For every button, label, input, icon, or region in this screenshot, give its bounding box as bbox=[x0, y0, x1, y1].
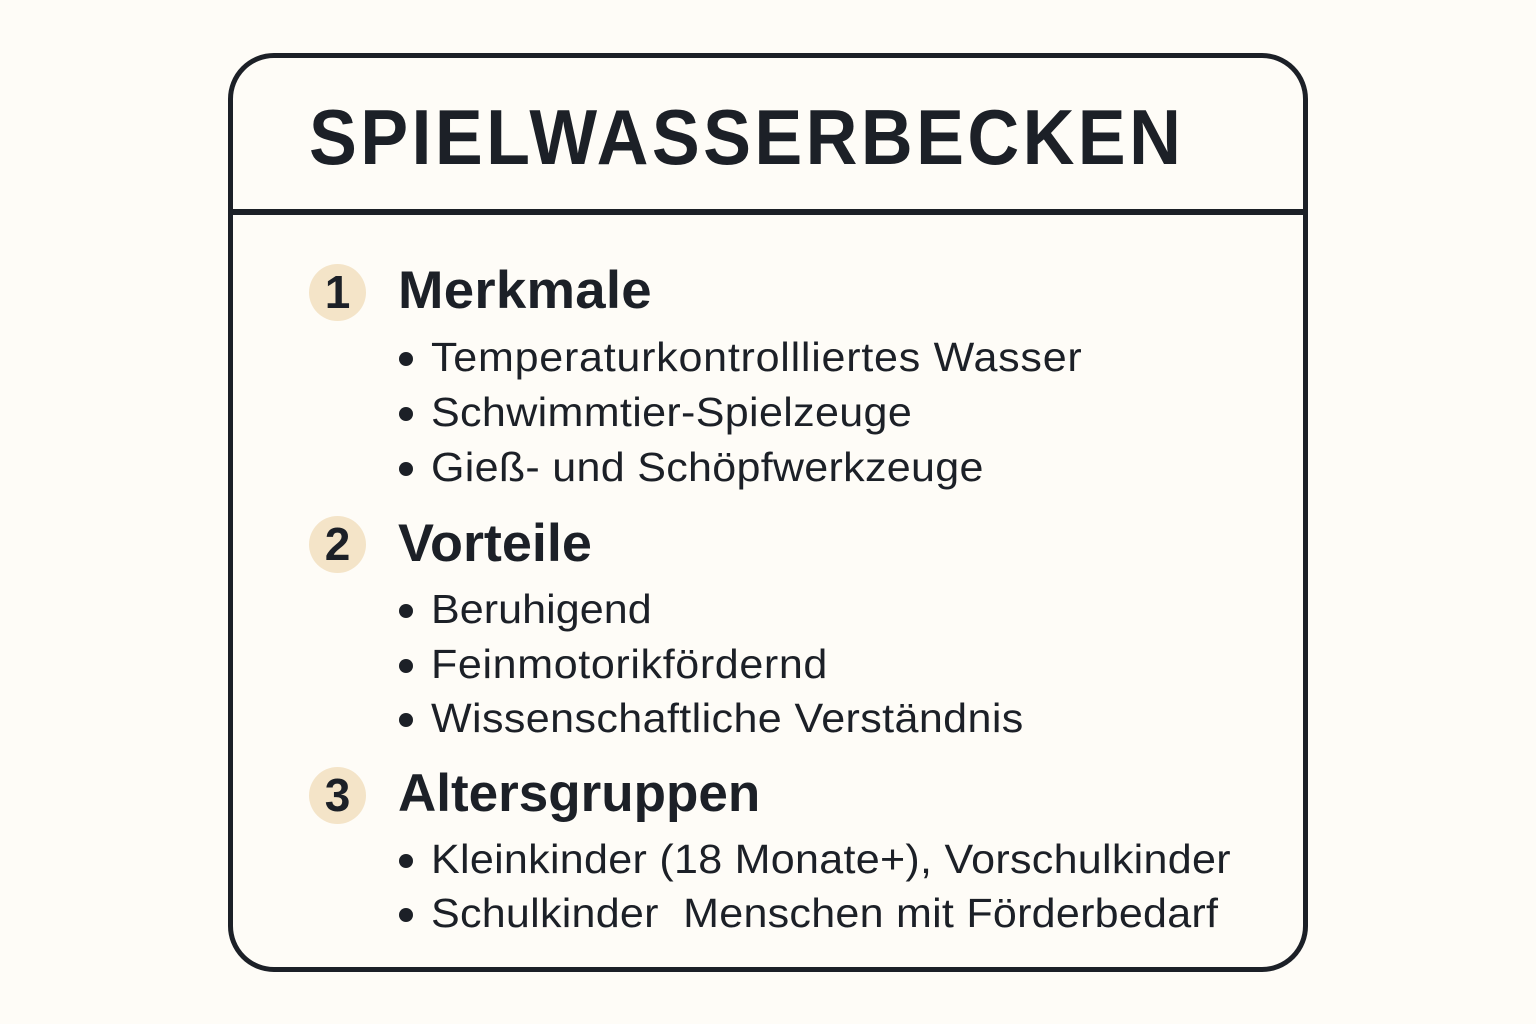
list item: Temperaturkontrollliertes Wasser bbox=[431, 334, 1082, 380]
number badge 1 bbox=[309, 264, 366, 321]
list item: Beruhigend bbox=[431, 586, 652, 632]
list item: Schwimmtier-Spielzeuge bbox=[431, 389, 912, 435]
number badge 2: 2 bbox=[325, 518, 350, 570]
list item: Kleinkinder (18 Monate+), Vorschulkinder bbox=[431, 836, 1231, 882]
number badge 1: 1 bbox=[325, 266, 350, 318]
title: SPIELWASSERBECKEN bbox=[309, 93, 1184, 181]
list item: Gieß- und Schöpfwerkzeuge bbox=[431, 444, 984, 490]
number badge 2 bbox=[309, 516, 366, 573]
number badge 3 bbox=[309, 767, 366, 824]
number badge 3: 3 bbox=[325, 769, 350, 821]
heading: Merkmale: Merkmale bbox=[398, 261, 652, 320]
list item: Feinmotorikfördernd bbox=[431, 641, 828, 687]
heading: Altersgruppen: Altersgruppen bbox=[398, 764, 760, 823]
panel: card bbox=[228, 53, 1308, 972]
list item: Wissenschaftliche Verständnis bbox=[431, 695, 1024, 741]
heading: Vorteile: Vorteile bbox=[398, 514, 592, 573]
list item: Schulkinder Menschen mit Förderbedarf bbox=[431, 890, 1218, 936]
header divider bbox=[230, 209, 1306, 215]
